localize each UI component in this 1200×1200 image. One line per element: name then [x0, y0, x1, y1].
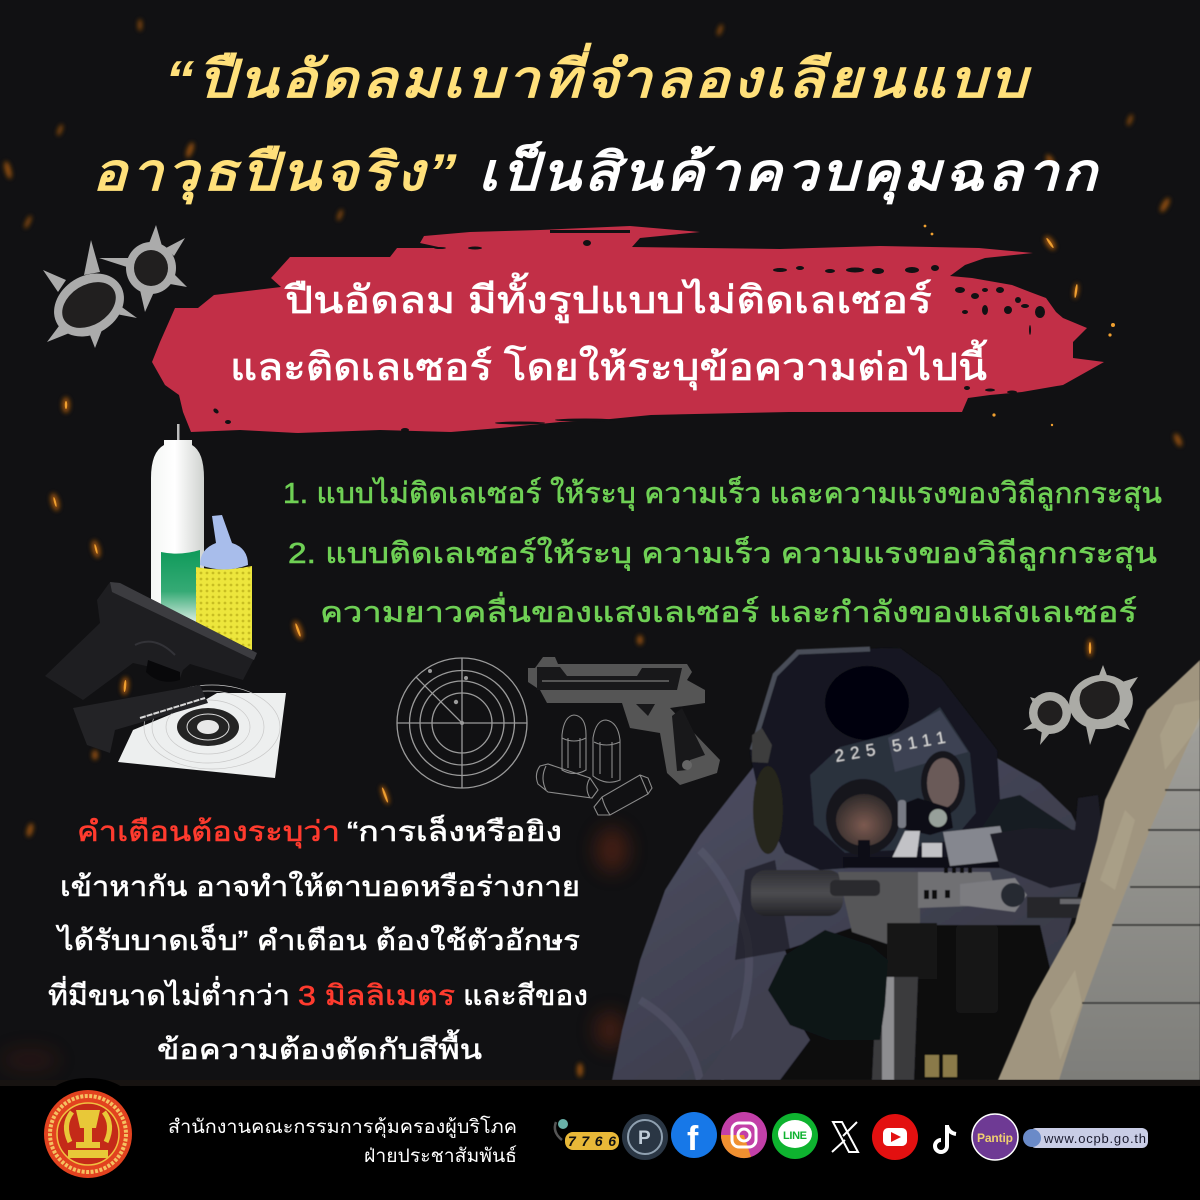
- radar icon: [397, 658, 527, 788]
- subheading: [230, 272, 988, 390]
- decorative glow: [0, 828, 628, 1072]
- Facebook icon: [671, 1112, 717, 1158]
- barrel: [1027, 897, 1121, 918]
- Facebook icon: f: [687, 1120, 699, 1158]
- title line 1: “ปืนอัดลมเบาที่จำลองเลียนแบบ: [165, 42, 1032, 109]
- soldier photo: [612, 648, 1121, 1080]
- shoulder shadow: [735, 860, 790, 960]
- hoodie folds: [640, 850, 749, 1080]
- department name: [168, 1115, 517, 1167]
- handguard: [918, 872, 1000, 908]
- title line 2 gold: อาวุธปืนจริง”: [92, 144, 460, 205]
- flashlight: [960, 878, 1027, 912]
- forearm sleeve: [700, 990, 810, 1080]
- requirement 1: 1. แบบไม่ติดเลเซอร์ ให้ระบุ ความเร็ว และความแรงของวิถีลูกกระสุน: [283, 475, 1162, 511]
- requirement 2 continued: ความยาวคลื่นของแสงเลเซอร์ และกำลังของแสงเลเซอร์: [320, 592, 1137, 629]
- rail and rear sight: [843, 840, 1000, 868]
- charging tube: [830, 880, 880, 896]
- department line 2: ฝ่ายประชาสัมพันธ์: [364, 1145, 517, 1167]
- department line 1: สำนักงานคณะกรรมการคุ้มครองผู้บริโภค: [168, 1115, 517, 1139]
- tan wall edge: [998, 660, 1200, 1080]
- target paper: [118, 693, 286, 778]
- ear cup: [753, 766, 783, 854]
- OCPB icon: [622, 1114, 668, 1160]
- LINE icon: LINE: [783, 1130, 807, 1142]
- LINE icon: [772, 1113, 818, 1159]
- footer bar: [0, 1086, 1200, 1200]
- hood shadow right: [975, 795, 1072, 870]
- wall patches: [1050, 700, 1200, 1060]
- bullet holes top left: [42, 225, 187, 349]
- plank seams: [1082, 790, 1200, 1003]
- product photo: airsoft gun set: [45, 424, 286, 778]
- strip under photo: [0, 1080, 1200, 1086]
- hoodie body: [612, 758, 1090, 1080]
- mask cheek light: [888, 710, 968, 772]
- brass cartridges: [925, 1055, 957, 1077]
- hotline 7766 icon: [555, 1119, 619, 1150]
- gas can: [151, 424, 204, 625]
- gas mask: [810, 707, 976, 853]
- magazine: [73, 685, 208, 753]
- brush speckles: [212, 230, 1045, 432]
- subheading line 2: และติดเลเซอร์ โดยให้ระบุข้อความต่อไปนี้: [230, 339, 988, 390]
- rear glove: [768, 930, 888, 1040]
- receiver: [838, 872, 920, 945]
- sight mount: [890, 831, 942, 862]
- handguard vents: [924, 868, 972, 899]
- TikTok icon: [935, 1125, 956, 1152]
- pistol icon: [528, 657, 720, 785]
- wall: [998, 660, 1200, 1080]
- warning size highlight: 3 มิลลิเมตร: [298, 980, 455, 1011]
- bullet holes bottom right: [1023, 665, 1138, 745]
- Pantip icon: Pantip: [977, 1131, 1013, 1145]
- seal logo: [44, 1078, 132, 1178]
- YouTube icon: [872, 1114, 918, 1160]
- mask lens right: [921, 751, 965, 815]
- sight scope: [898, 798, 953, 835]
- lower dark torso: [780, 925, 1055, 1080]
- decorative spark cores: [53, 225, 1115, 803]
- pistol: [45, 582, 257, 700]
- forward hand: [990, 795, 1102, 888]
- hotline 7766 icon: 7766: [568, 1133, 616, 1149]
- wood planks: [1059, 717, 1200, 1080]
- warning line 4 start: ที่มีขนาดไม่ต่ำกว่า: [48, 976, 290, 1011]
- buttstock: [751, 870, 843, 916]
- mask lens left: [826, 779, 900, 855]
- warning label: คำเตือนต้องระบุว่า: [77, 816, 340, 849]
- balaclava top: [825, 666, 909, 740]
- mask number: 225 5111: [833, 728, 947, 766]
- warning line 4 end: และสีของ: [463, 980, 588, 1011]
- green requirements list: [283, 475, 1162, 629]
- brush shape: [152, 226, 1104, 433]
- helmet and hood: [750, 648, 1000, 870]
- warning line 1: “การเล็งหรือยิง: [347, 814, 562, 847]
- bullets icon: [536, 715, 652, 815]
- rifle magazine: [872, 977, 918, 1080]
- Instagram icon: [721, 1112, 767, 1158]
- requirement 2: 2. แบบติดเลเซอร์ให้ระบุ ความเร็ว ความแรงของวิถีลูกกระสุน: [288, 535, 1157, 571]
- OCPB icon: P: [638, 1128, 651, 1149]
- warning line 2: เข้าหากัน อาจทำให้ตาบอดหรือร่างกาย: [60, 870, 580, 902]
- magazine well: [887, 923, 937, 979]
- foregrip: [956, 925, 998, 1013]
- title line 2 white: เป็นสินค้าควบคุมฉลาก: [478, 141, 1101, 205]
- warning text: [48, 814, 588, 1065]
- ear cup highlight: [752, 728, 772, 763]
- subheading line 1: ปืนอัดลม มีทั้งรูปแบบไม่ติดเลเซอร์: [284, 272, 932, 323]
- website pill: www.ocpb.go.th: [1043, 1131, 1146, 1146]
- title: [92, 42, 1101, 205]
- warning line 3: ได้รับบาดเจ็บ” คำเตือน ต้องใช้ตัวอักษร: [56, 923, 580, 956]
- X icon: [832, 1122, 858, 1152]
- BB bottle: [196, 515, 252, 650]
- warning line 5: ข้อความต้องตัดกับสีพื้น: [157, 1029, 482, 1065]
- helmet rim highlight: [752, 649, 870, 750]
- red brush banner: [152, 226, 1104, 433]
- website pill: [1023, 1128, 1148, 1148]
- Pantip icon: [972, 1114, 1018, 1160]
- optic block: [943, 826, 1010, 866]
- target rings: [144, 685, 280, 769]
